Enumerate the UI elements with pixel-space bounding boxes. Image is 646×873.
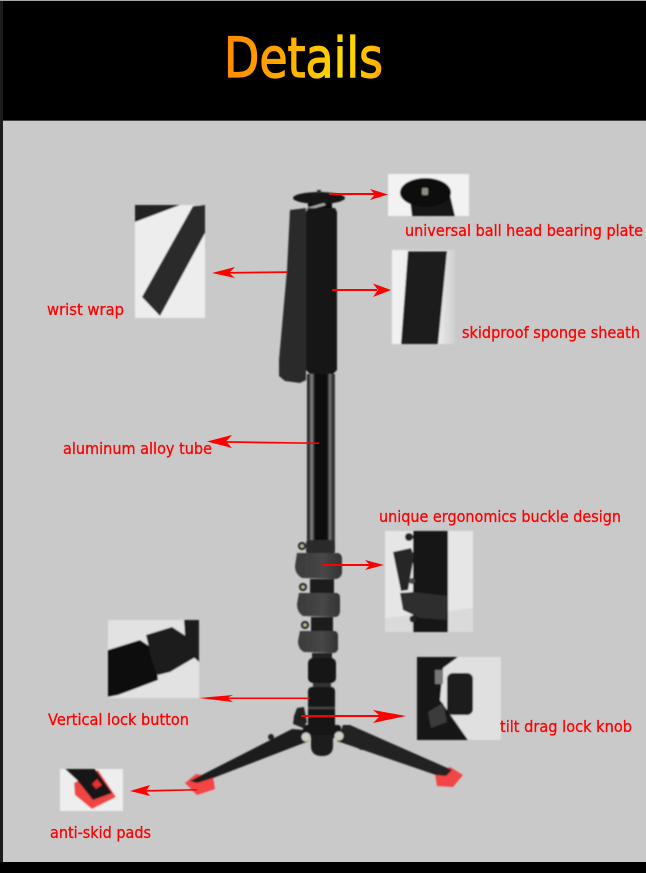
vertical lock collars: [303, 658, 341, 756]
label: unique ergonomics buckle design: unique ergonomics buckle design: [379, 507, 621, 526]
arrow: wrist wrap: [212, 267, 287, 278]
inset: bearing plate: [388, 174, 469, 216]
left edge strip: [0, 1, 3, 862]
arrow: buckle: [322, 560, 384, 570]
inset: foot pad: [60, 769, 123, 811]
arrow: bearing plate: [329, 189, 388, 200]
right foot pad: [435, 767, 463, 787]
right leg: [337, 725, 452, 776]
top bearing plate: [293, 190, 345, 211]
title: Details: [224, 26, 383, 90]
label: anti-skid pads: anti-skid pads: [50, 823, 151, 842]
wrist strap: [279, 208, 306, 383]
arrow: sponge sheath: [332, 284, 391, 297]
aluminum tube: [307, 374, 335, 542]
label: wrist wrap: wrist wrap: [47, 300, 124, 319]
inset: tilt lock knob: [417, 657, 501, 740]
arrow: anti-skid pads: [130, 785, 197, 796]
arrow: tilt knob: [301, 710, 406, 723]
tilt lock lever: [293, 707, 307, 728]
arrow: aluminum tube: [207, 435, 319, 448]
top title band: [0, 0, 646, 121]
leg bolts and knobs: [268, 732, 367, 750]
inset: wrist strap: [135, 205, 205, 318]
label: tilt drag lock knob: tilt drag lock knob: [500, 717, 632, 736]
label: Vertical lock button: Vertical lock button: [48, 710, 189, 729]
monopod product photo: [185, 190, 463, 795]
left foot pad: [185, 774, 215, 795]
label: aluminum alloy tube: aluminum alloy tube: [63, 439, 212, 458]
inset: sponge sheath: [392, 250, 455, 344]
buckle locks: [295, 540, 342, 659]
bottom band: [0, 862, 646, 873]
foam sheath: [306, 208, 337, 374]
left leg: [190, 729, 309, 783]
inset: buckle: [385, 531, 473, 632]
inset: vertical lock button: [108, 620, 199, 698]
arrow: vertical lock: [199, 695, 310, 702]
